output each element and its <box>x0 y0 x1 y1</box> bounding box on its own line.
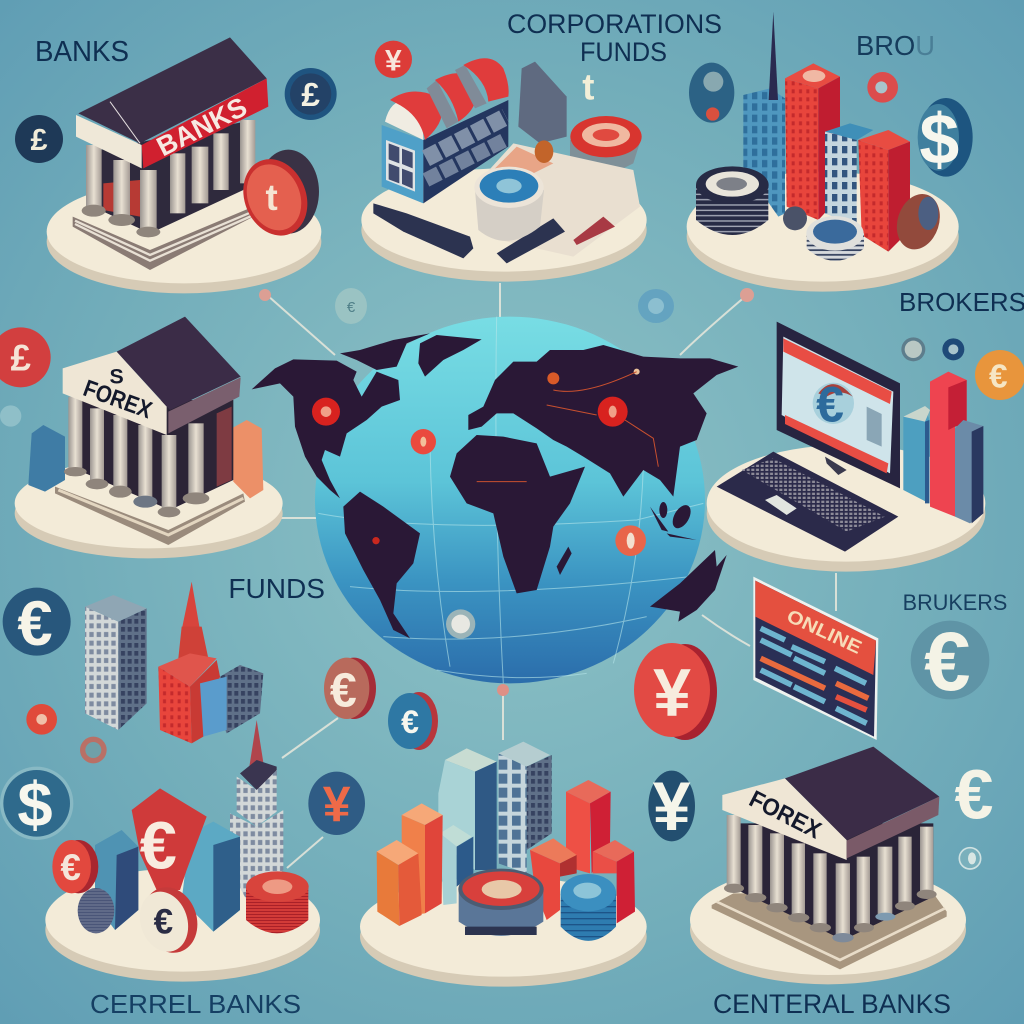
bar chart <box>903 372 983 523</box>
map markers <box>312 369 658 639</box>
panel: online screen: ONLINE <box>784 605 865 658</box>
Australia <box>650 550 727 622</box>
icon: small red badge <box>26 704 57 735</box>
heading: BROU: BROU <box>856 30 935 61</box>
icon: pound coin left <box>0 327 51 387</box>
icon: empire tower <box>230 720 283 900</box>
Indonesia <box>650 507 668 532</box>
icon: cream currency glyph: t <box>582 66 594 107</box>
icon: forex bank building <box>712 747 947 969</box>
icon: red coin stack <box>246 871 309 933</box>
icon: dollar coin: $ <box>919 99 959 179</box>
icon: euro coin large: € <box>17 589 53 659</box>
icon: euro glyph: € <box>955 755 993 833</box>
heading: CENTERAL BANKS: CENTERAL BANKS <box>713 989 951 1019</box>
icon: red spire tower <box>158 582 263 743</box>
Arctic islands <box>340 333 430 370</box>
icon: cream coin <box>132 880 206 960</box>
icon: dark coin stack <box>78 888 114 933</box>
icon: blue blocks <box>95 822 240 932</box>
icon: red shield coin: € <box>140 809 177 883</box>
icon: computer monitor <box>777 322 900 488</box>
label: FOREX sign: S <box>110 364 124 388</box>
panel: funds lower left <box>3 573 376 763</box>
icon: red euro coin <box>324 658 376 719</box>
connector lines <box>259 283 836 868</box>
icon: dollar coin left: $ <box>17 771 53 841</box>
icon: red coin: t <box>266 177 278 218</box>
heading: corporations funds <box>507 9 722 67</box>
label: FOREX sign <box>80 364 155 424</box>
icon: red yen coin centre <box>634 643 717 740</box>
icon: faint badge left of globe top: € <box>347 299 356 316</box>
icon: red stacked coin <box>570 116 642 180</box>
icon: red yen coin centre: ¥ <box>653 655 691 731</box>
icon: blue euro coin: € <box>401 704 419 740</box>
globe <box>252 317 738 683</box>
icon: keyboard <box>717 452 898 552</box>
icon: pound coin <box>285 68 337 120</box>
icon: blue yen coin <box>308 772 365 835</box>
icon: euro coin right <box>911 615 989 708</box>
icon: yen badge: ¥ <box>385 45 402 78</box>
panel: forex bank left <box>0 317 283 558</box>
panel: central bank lower right <box>690 747 993 984</box>
icon: forex bank building <box>55 317 245 545</box>
icon: pale badge <box>0 405 21 427</box>
icon: pound coin: £ <box>301 77 320 114</box>
North America <box>252 359 400 498</box>
panel: central banks lower left <box>0 720 365 982</box>
icon: red euro coin: € <box>330 664 357 718</box>
icon: grey tower <box>85 595 147 730</box>
papers on platform <box>480 143 640 257</box>
icon: question badge <box>689 63 734 123</box>
heading: CERREL BANKS: CERREL BANKS <box>90 989 301 1019</box>
globe grid <box>318 317 703 683</box>
icon: small badges <box>901 337 964 361</box>
icon: small dark coin <box>783 206 807 230</box>
Madagascar <box>557 547 572 575</box>
label: FOREX sign: FOREX <box>80 375 155 424</box>
icon: blue euro coin <box>388 692 438 750</box>
icon: dark blocks <box>373 203 473 258</box>
icon: euro coin <box>15 115 63 163</box>
icon: small badge <box>959 848 981 869</box>
icon: small red coin <box>52 840 98 893</box>
icon: gray building <box>518 62 567 143</box>
icon: pound coin left: £ <box>10 338 31 379</box>
Eurasia <box>468 345 738 497</box>
icon: small blue building <box>28 425 65 492</box>
label: BANKS sign: BANKS <box>152 91 252 162</box>
panel: brokers computer right <box>707 322 1024 740</box>
Africa <box>450 435 585 593</box>
icon: faint badge right of globe top <box>638 289 674 323</box>
icon: red coin <box>232 149 319 245</box>
icon: cream coin: € <box>154 902 173 941</box>
icon: small red coin: € <box>60 847 81 888</box>
Greenland <box>418 335 482 377</box>
icon: red coin stack <box>458 869 544 936</box>
world map continents <box>252 333 738 638</box>
icon: gold badge <box>535 140 553 163</box>
icon: computer monitor: € <box>816 377 844 433</box>
icon: city towers <box>743 12 910 252</box>
heading: BANKS: BANKS <box>35 36 129 68</box>
icon: euro coin large <box>3 588 71 659</box>
heading: corporations funds: FUNDS <box>580 37 667 67</box>
icon: blue coin stack <box>474 167 544 241</box>
South America <box>343 492 420 638</box>
icon: faint badge left of globe top <box>335 288 367 324</box>
panel: city coins bottom centre <box>360 742 695 987</box>
icon: orange coin: € <box>989 358 1008 395</box>
icon: euro coin: £ <box>30 123 48 157</box>
icon: red badge <box>867 72 898 103</box>
icon: dollar coin left <box>0 767 73 841</box>
icon: blue coin stack <box>561 874 616 941</box>
icon: yen badge <box>375 41 412 78</box>
heading: BROKERS right: BROKERS <box>899 287 1024 317</box>
panel: corporations <box>361 41 647 282</box>
icon: small teal badge <box>80 737 107 763</box>
icon: red shield coin <box>132 788 207 890</box>
panel: online screen <box>753 577 878 740</box>
heading: BRUKERS lower right: BRUKERS <box>903 590 1007 615</box>
icon: market building <box>382 58 509 203</box>
icon: blue coin stack <box>806 216 864 261</box>
panel: brokers top right <box>687 12 973 292</box>
icon: small orange building <box>232 420 263 498</box>
panel: banks top left <box>15 37 337 293</box>
heading: FUNDS: FUNDS <box>228 573 325 604</box>
icon: orange coin <box>975 350 1024 400</box>
label: FOREX sign: FOREX <box>745 786 825 844</box>
icon: bank building <box>73 37 268 270</box>
icon: skyscrapers <box>377 742 635 926</box>
icon: blue yen coin: ¥ <box>323 777 351 833</box>
icon: yen coin: ¥ <box>653 769 691 845</box>
icon: navy coin stack <box>696 166 769 235</box>
icon: gem <box>890 188 947 255</box>
heading: corporations funds: CORPORATIONS <box>507 9 722 39</box>
icon: euro coin right: € <box>924 615 971 708</box>
